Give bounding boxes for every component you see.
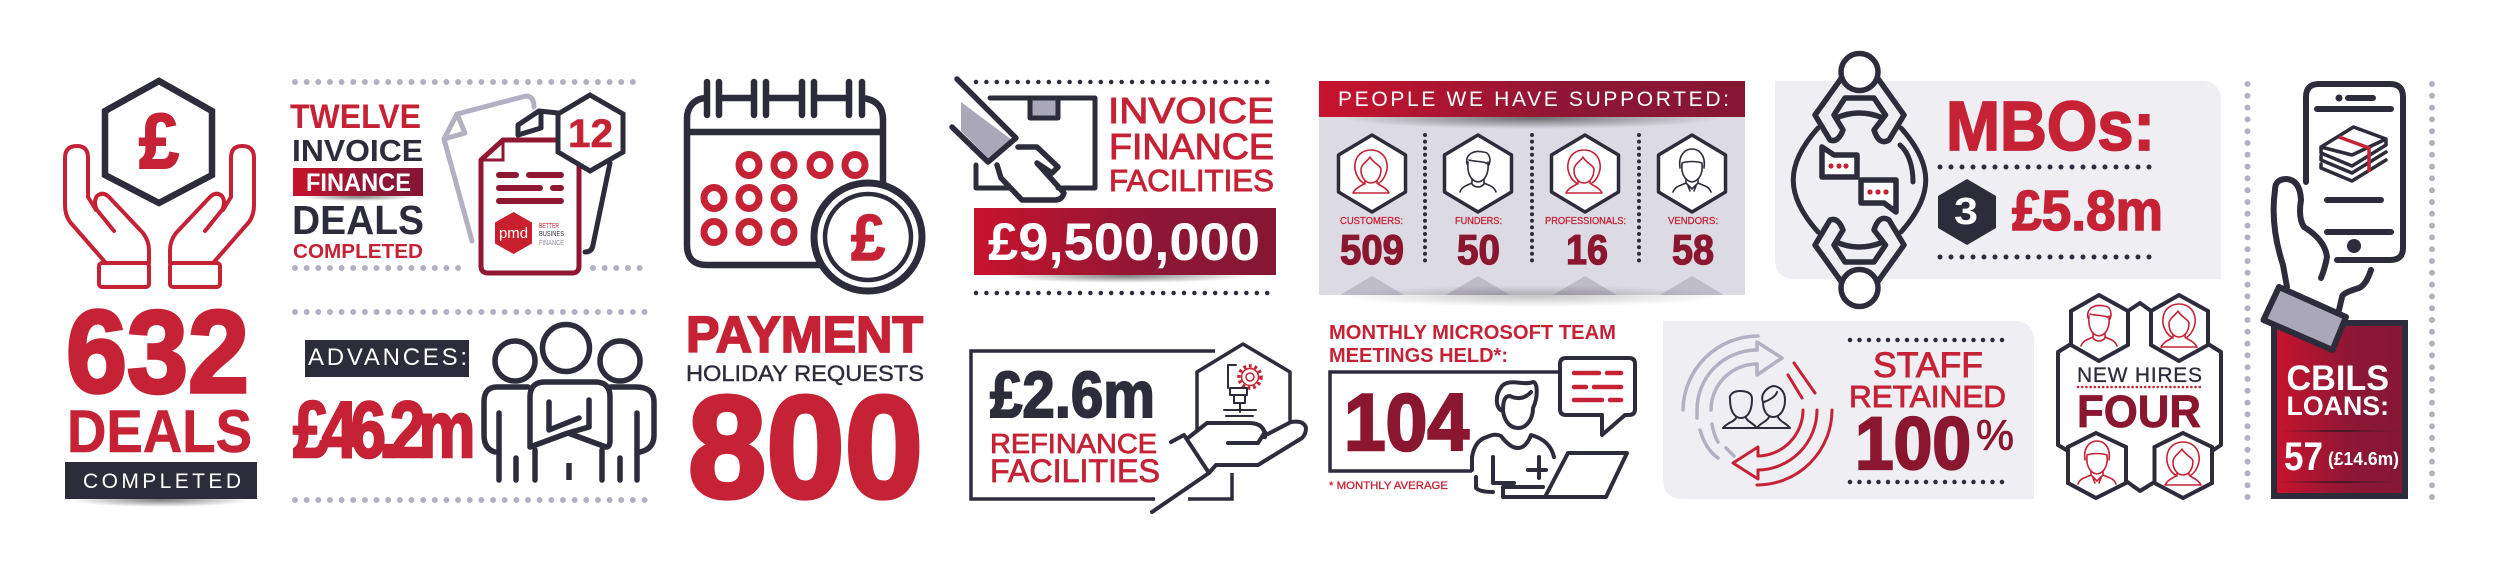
icon: two people	[1723, 386, 1790, 428]
label: completed bar	[65, 462, 257, 499]
panel: monthly team meetings	[1329, 322, 1635, 497]
icon: 12 hexagon: 12	[568, 112, 613, 156]
dotted rules	[1850, 340, 2003, 482]
shadow under header	[1342, 107, 1722, 129]
stat: MBO value: £5.8m	[2012, 179, 2163, 243]
dotted column dividers	[1425, 135, 1639, 264]
icon: hand and parcel	[952, 79, 1095, 200]
panel: invoice finance facilities	[952, 79, 1276, 293]
stat: advances value: £46.2m	[293, 385, 475, 475]
red loans card: CBILS	[2286, 359, 2389, 398]
heading: MBOs: MBOs:	[1946, 87, 2155, 165]
panel: people we have supported	[1319, 81, 1745, 307]
stat: 632: 632	[66, 286, 249, 417]
icon: grey paper	[444, 96, 534, 241]
icon: phone	[2306, 84, 2403, 260]
column: customers: 509	[1340, 226, 1404, 273]
panel background	[1775, 81, 2221, 279]
icon: pound hexagon: £	[139, 97, 179, 185]
panel: advances	[293, 312, 654, 500]
text: finance bar: FINANCE	[306, 169, 411, 197]
text: invoice: INVOICE	[292, 133, 423, 168]
icon: caring hands	[65, 146, 254, 287]
icon: meeting table	[1793, 54, 1926, 306]
column: customers: CUSTOMERS:	[1340, 215, 1403, 227]
panel: MBOs	[1775, 54, 2221, 306]
panel: twelve invoice finance deals	[290, 82, 644, 273]
icon: hand holding phone	[2264, 179, 2371, 350]
column: funders	[1444, 135, 1512, 273]
label: completed bar: COMPLETED	[83, 470, 241, 493]
dotted rules	[976, 82, 1274, 293]
text: invoice: INVOICE	[1108, 90, 1274, 131]
footnote: * MONTHLY AVERAGE	[1329, 480, 1448, 492]
panel background	[1663, 321, 2034, 499]
panel: payment holiday calendar	[686, 82, 924, 528]
header bar: PEOPLE WE HAVE SUPPORTED:	[1338, 88, 1729, 111]
icon: 12 hexagon	[558, 95, 623, 171]
text: facilities: FACILITIES	[1109, 163, 1274, 198]
panel: 632 deals completed	[65, 81, 257, 507]
red loans card: (£14.6m)	[2328, 449, 2399, 469]
panel: CBILS loans	[2248, 84, 2432, 498]
icon: document: FINANCE	[539, 238, 564, 247]
stat: refinance value: £2.6m	[990, 358, 1155, 431]
shadow under finance bar	[303, 193, 413, 201]
text: deals: DEALS	[292, 197, 424, 243]
icon: grey rotating arrow	[1683, 336, 1782, 458]
shadow under completed bar	[71, 493, 251, 507]
icon: top-left hire	[2071, 295, 2128, 361]
stat: 100 percent: 100	[1855, 402, 1971, 485]
text: holiday requests: HOLIDAY REQUESTS	[686, 361, 924, 386]
panel: refinance facilities	[971, 344, 1306, 512]
stat: value bar: £9,500,000	[988, 213, 1260, 272]
red loans card: 57	[2284, 435, 2323, 479]
icon: document: BETTER	[539, 221, 559, 230]
icon: money stack	[2321, 127, 2386, 181]
icon: document	[481, 140, 579, 273]
stat: 104: 104	[1344, 378, 1469, 468]
stat: 800: 800	[688, 366, 923, 528]
badge: 3: 3	[1954, 191, 1978, 233]
text: twelve: TWELVE	[290, 98, 421, 136]
panel: staff retained	[1663, 321, 2034, 499]
column: vendors: VENDORS:	[1668, 215, 1718, 227]
icon: bottom-left hire	[2068, 433, 2126, 498]
heading line 1: MONTHLY MICROSOFT TEAM	[1329, 322, 1616, 344]
heading line 2: MEETINGS HELD*:	[1329, 345, 1508, 367]
icon: calendar	[687, 82, 922, 291]
text: facilities: FACILITIES	[990, 453, 1160, 489]
text: payment: PAYMENT	[686, 306, 923, 363]
dotted rules	[295, 82, 644, 268]
column: vendors	[1658, 135, 1726, 273]
dotted side rules	[2248, 84, 2432, 498]
tabs	[1340, 276, 1724, 295]
dotted rules	[1940, 167, 2160, 257]
column: professionals: 16	[1566, 226, 1608, 273]
column: professionals	[1545, 135, 1626, 273]
text: finance: FINANCE	[1109, 126, 1274, 167]
icon: pound hexagon	[105, 81, 212, 203]
text: completed: COMPLETED	[293, 241, 423, 263]
column: professionals: PROFESSIONALS:	[1545, 215, 1626, 227]
frame	[971, 351, 1232, 499]
column: vendors: 58	[1672, 226, 1714, 273]
red dotted rule	[2078, 386, 2201, 388]
shadow under panel	[1342, 285, 1722, 307]
icon: top-right hire	[2151, 295, 2208, 361]
icon: hand holding machine	[1152, 344, 1306, 512]
badge: 3	[1938, 179, 1996, 245]
icon: document: pmd	[499, 225, 528, 242]
red loans card: LOANS:	[2286, 391, 2389, 421]
column: funders: FUNDERS:	[1455, 215, 1502, 227]
column: customers	[1338, 135, 1406, 273]
text: staff: STAFF	[1873, 346, 1983, 385]
header bar	[1319, 81, 1745, 117]
icon: three people	[484, 324, 654, 480]
icon: calendar: £	[851, 201, 885, 274]
icon: red rotating arrow	[1733, 363, 1832, 485]
text: refinance: REFINANCE	[990, 428, 1157, 459]
frame	[1330, 372, 1560, 471]
icon: dark paper	[518, 111, 610, 252]
icon: person at laptop	[1472, 382, 1627, 497]
stat: 100 percent: %	[1976, 412, 2014, 460]
outline connector	[2058, 303, 2221, 491]
icon: speech bubble	[1560, 358, 1635, 435]
shadow under value bar	[1000, 269, 1250, 283]
text: retained: RETAINED	[1849, 379, 2006, 414]
label: DEALS: DEALS	[67, 398, 252, 465]
icon: document: BUSINES	[539, 229, 564, 238]
red loans card	[2274, 323, 2405, 496]
panel: new hires	[2058, 295, 2221, 498]
panel background	[1319, 81, 1745, 295]
label: advances: ADVANCES:	[308, 344, 467, 371]
dotted rules	[295, 312, 648, 500]
icon: bottom-right hire	[2154, 433, 2212, 498]
stat: four: FOUR	[2077, 386, 2201, 437]
text: new hires: NEW HIRES	[2077, 364, 2202, 387]
column: funders: 50	[1457, 226, 1500, 273]
